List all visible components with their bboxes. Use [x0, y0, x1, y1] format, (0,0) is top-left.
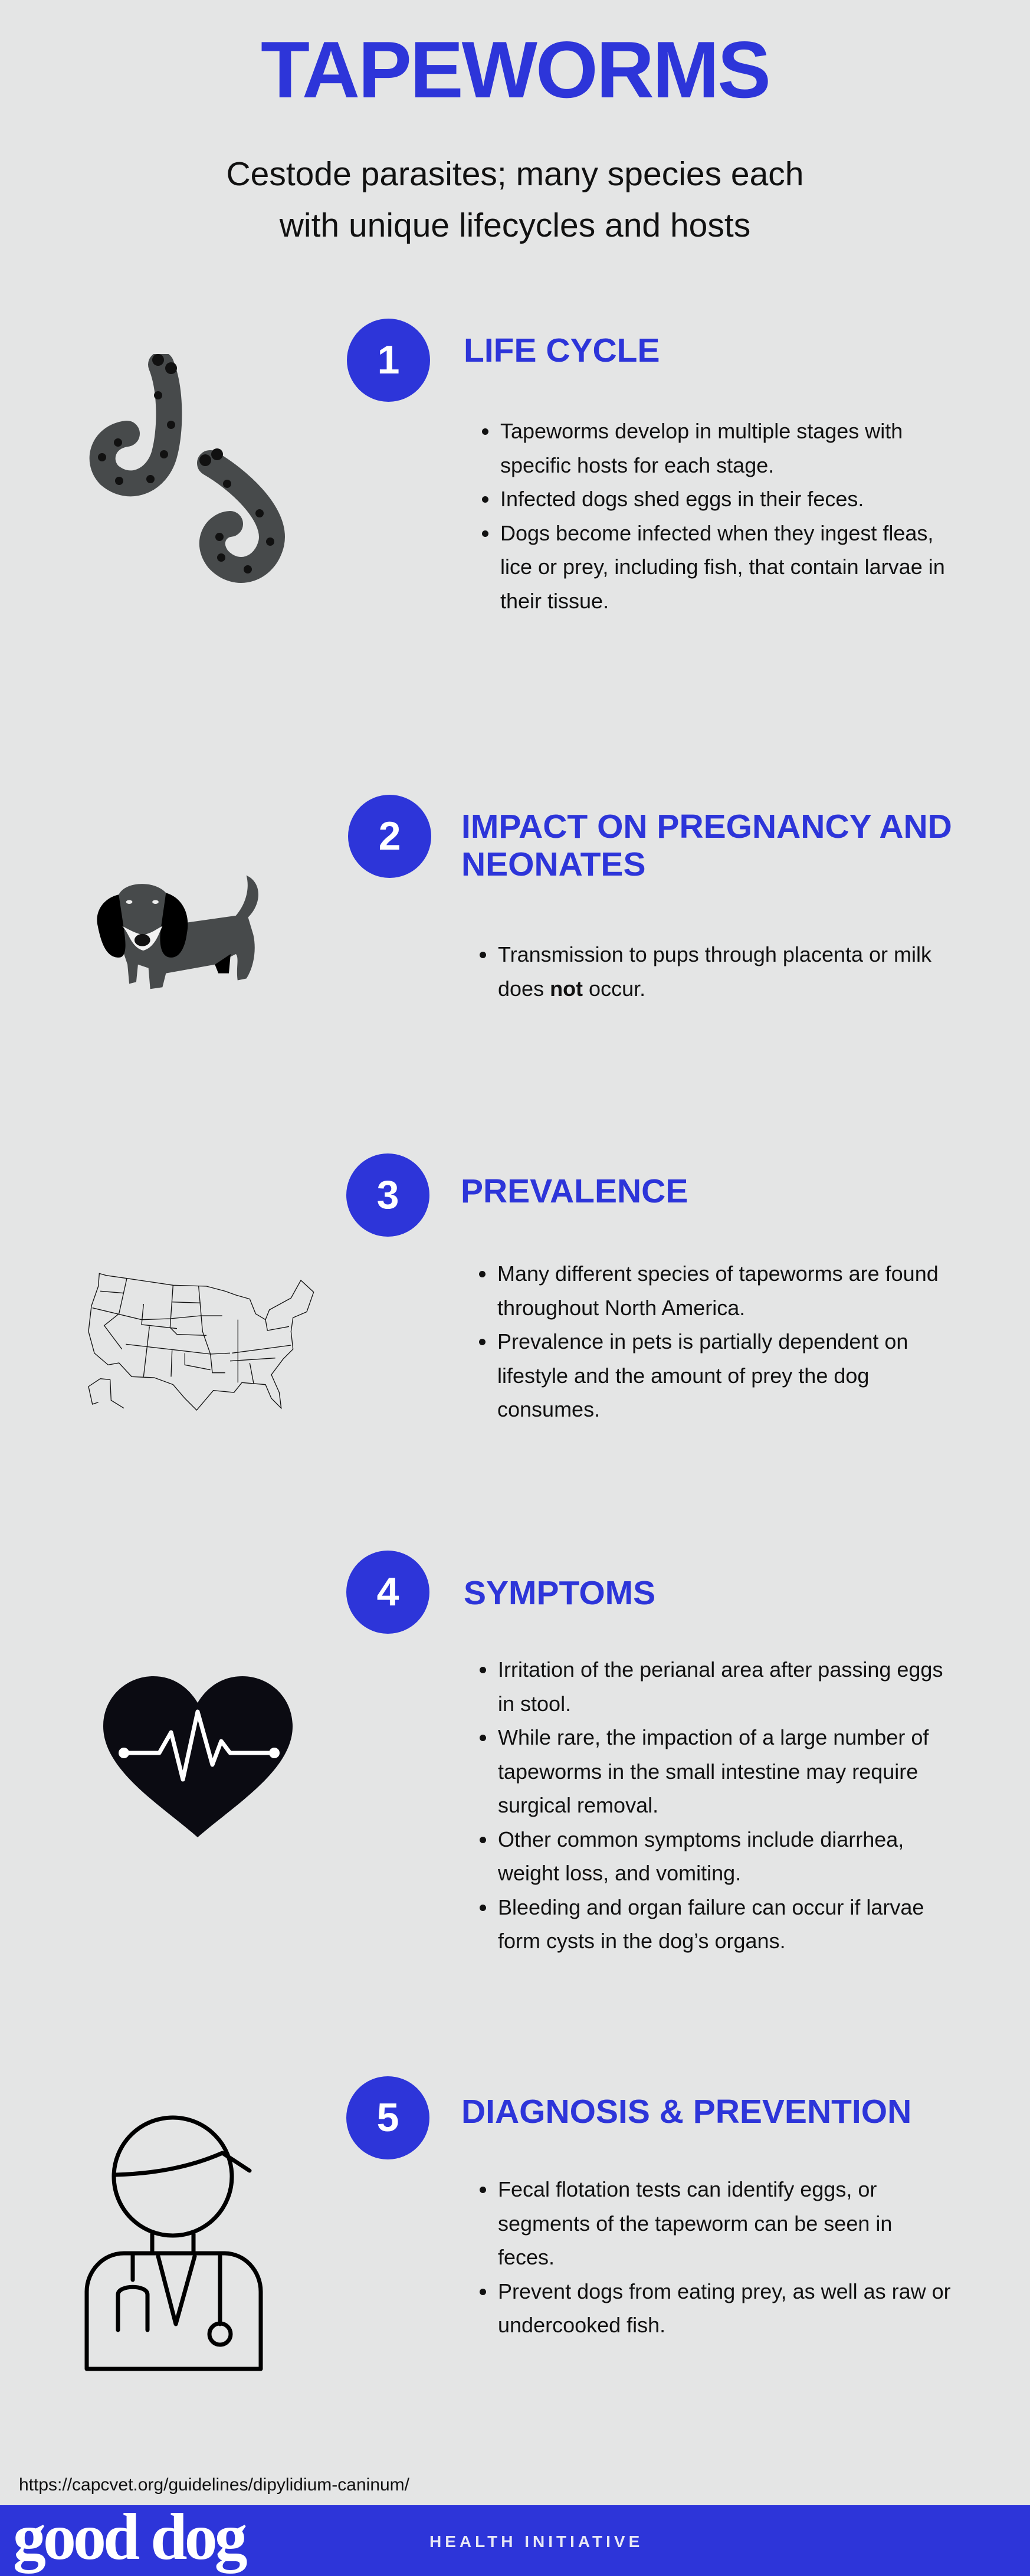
footer text: health initiative: HEALTH INITIATIVE	[429, 2532, 643, 2551]
footer band	[0, 2505, 1030, 2576]
bullets: diagnosis: undercooked fish.	[498, 2313, 665, 2337]
bullets: prevalence	[479, 1261, 939, 1421]
subtitle	[226, 155, 804, 244]
icon: tapeworms	[90, 354, 285, 583]
icon: US map	[88, 1273, 314, 1411]
bullets: diagnosis: Fecal flotation tests can identify eggs, or	[498, 2177, 877, 2201]
number circle 2	[348, 795, 431, 878]
subtitle: with unique lifecycles and hosts	[280, 207, 750, 244]
heading: symptoms: SYMPTOMS	[464, 1574, 655, 1612]
heading: impact on pregnancy: IMPACT ON PREGNANCY AND	[461, 808, 952, 845]
heading: life cycle: LIFE CYCLE	[464, 332, 660, 369]
bullets: life cycle: their tissue.	[500, 589, 609, 612]
bullets: symptoms: tapeworms in the small intestine may require	[498, 1759, 918, 1783]
bullets: symptoms: Bleeding and organ failure can occur if larvae	[498, 1895, 924, 1919]
bullets: symptoms: weight loss, and vomiting.	[498, 1861, 741, 1885]
heading: impact on pregnancy: NEONATES	[461, 845, 645, 883]
bullets: pregnancy: does not occur.	[498, 976, 645, 1001]
bullets: life cycle: Dogs become infected when they ingest fleas,	[500, 520, 933, 545]
bullets: prevalence: Many different species of tapeworms are found	[497, 1261, 939, 1286]
bullets: prevalence: Prevalence in pets is partially dependent on	[497, 1329, 908, 1353]
title: TAPEWORMS	[261, 25, 769, 114]
bullets: life cycle	[482, 419, 945, 612]
heading: impact on pregnancy	[461, 808, 952, 883]
icon: heart with pulse	[103, 1676, 293, 1837]
section 1: life cycle	[90, 319, 945, 612]
bullets: symptoms: Other common symptoms include diarrhea,	[498, 1827, 904, 1851]
bullets: prevalence: throughout North America.	[497, 1296, 745, 1319]
subtitle: Cestode parasites; many species each	[226, 155, 804, 193]
number circle 4: 4	[377, 1569, 399, 1614]
source url: https://capcvet.org/guidelines/dipylidium-caninum/	[19, 2475, 409, 2495]
bullets: prevalence: consumes.	[497, 1397, 600, 1421]
number circle 2: 2	[379, 814, 401, 858]
bullets: symptoms: Irritation of the perianal area after passing eggs	[498, 1657, 943, 1682]
bullets: diagnosis	[480, 2177, 951, 2337]
section 4: symptoms	[103, 1551, 943, 1953]
bullets: life cycle: specific hosts for each stage.	[500, 453, 774, 477]
bullets: life cycle: lice or prey, including fish, that contain larvae in	[500, 555, 945, 579]
icon: dachshund	[97, 876, 258, 989]
bullets: symptoms: in stool.	[498, 1691, 571, 1716]
number circle 5: 5	[377, 2095, 399, 2140]
bullets: pregnancy	[480, 942, 931, 1001]
bullets: symptoms: surgical removal.	[498, 1793, 658, 1817]
bullets: symptoms: While rare, the impaction of a large number of	[498, 1725, 929, 1749]
bullets: diagnosis: segments of the tapeworm can be seen in	[498, 2211, 892, 2235]
number circle 3: 3	[377, 1172, 399, 1217]
bullets: pregnancy: Transmission to pups through placenta or milk	[498, 942, 931, 966]
logo: good dog: good dog	[13, 2500, 245, 2574]
number circle 4	[346, 1551, 429, 1634]
bullets: life cycle: Infected dogs shed eggs in their feces.	[500, 487, 864, 511]
section 5: diagnosis	[85, 2076, 951, 2371]
icon: veterinarian	[85, 2116, 263, 2371]
heading: diagnosis & prevention: DIAGNOSIS & PREVENTION	[461, 2093, 911, 2131]
section 3: prevalence	[88, 1153, 939, 1421]
bullets: diagnosis: Prevent dogs from eating prey, as well as raw or	[498, 2279, 951, 2303]
bullets: prevalence: lifestyle and the amount of prey the dog	[497, 1363, 869, 1388]
bullets: diagnosis: feces.	[498, 2245, 555, 2269]
bullets: symptoms: form cysts in the dog’s organs.	[498, 1929, 786, 1953]
number circle 1	[347, 319, 430, 402]
bullets: life cycle: Tapeworms develop in multiple stages with	[500, 419, 903, 443]
number circle 3	[346, 1153, 429, 1237]
bullets: symptoms	[480, 1657, 943, 1953]
number circle 1: 1	[378, 337, 399, 382]
number circle 5	[346, 2076, 429, 2159]
heading: prevalence: PREVALENCE	[461, 1172, 688, 1210]
section 2: pregnancy	[97, 795, 952, 1001]
